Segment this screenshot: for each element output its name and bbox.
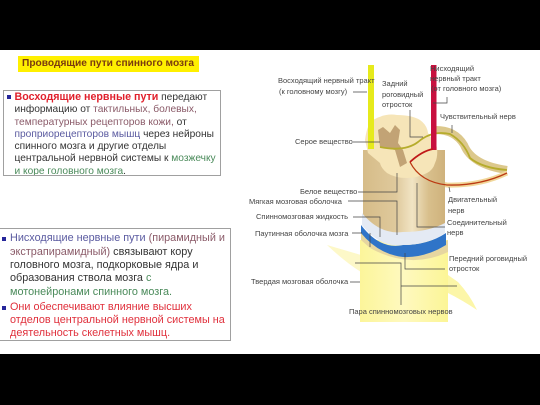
labels: (от головного мозга) (431, 84, 502, 93)
motor nerve sheath (412, 165, 507, 185)
labels: роговидный (382, 90, 423, 99)
sensory nerve fibre (380, 133, 507, 170)
cord cross-section white matter (365, 115, 437, 178)
labels: Мягкая мозговая оболочка (249, 197, 343, 206)
labels: Белое вещество (300, 187, 357, 196)
labels: Твердая мозговая оболочка (251, 277, 349, 286)
descending pathways text: образования ствола мозга с (10, 272, 151, 284)
motor nerve fibre (410, 162, 507, 185)
labels: отросток (382, 100, 413, 109)
blue arachnoid band (361, 225, 446, 257)
labels: Передний роговидный (449, 254, 527, 263)
influence text: Они обеспечивают влияние высших (10, 300, 192, 312)
labels: Задний (382, 79, 408, 88)
descending pathways text (10, 232, 225, 298)
labels: Соединительный (447, 218, 507, 227)
descending tract red (431, 65, 436, 150)
title: Проводящие пути спинного мозга (22, 58, 194, 69)
descending pathways text: Нисходящие нервные пути (пирамидный и (10, 232, 225, 244)
labels: нервный тракт (430, 74, 481, 83)
labels: нерв (448, 206, 464, 215)
ascending pathways text: спинного мозга и другие отделы (14, 141, 166, 152)
influence text: деятельность скелетных мышц. (10, 326, 170, 338)
influence text (10, 300, 225, 338)
cord column (363, 150, 445, 236)
ascending pathways text: температурных рецепторов кожи, от (14, 117, 187, 128)
descending pathways text: экстрапирамидный) связывают кору (10, 246, 193, 258)
labels: Нисходящий (430, 64, 474, 73)
yellow spinal nerve sheath (327, 240, 477, 322)
labels: Пара спинномозговых нервов (349, 307, 453, 316)
labels: Серое вещество (295, 137, 353, 146)
labels: Паутинная оболочка мозга (255, 229, 349, 238)
descending pathways text: головного мозга, подкорковые ядра и (10, 258, 198, 270)
title (18, 56, 199, 72)
labels (249, 64, 527, 316)
bullet (7, 95, 11, 99)
leader lines (348, 92, 457, 305)
dura mater band (361, 231, 448, 260)
labels: нерв (447, 228, 463, 237)
descending pathways text: мотонейронами спинного мозга. (10, 286, 172, 298)
labels: Чувствительный нерв (440, 112, 516, 121)
labels: Двигательный (448, 195, 497, 204)
descending tract branch (410, 149, 433, 162)
ascending pathways text: центральной нервной системы к мозжечку (14, 153, 216, 164)
grey matter (378, 125, 407, 167)
ascending pathways text: проприорецепторов мышц через нейроны (14, 129, 214, 140)
influence text: отделов центральной нервной системы на (10, 314, 225, 326)
sensory nerve (436, 130, 507, 170)
white fluid band (362, 213, 445, 245)
top black band (0, 0, 540, 50)
labels: (к головному мозгу) (279, 87, 348, 96)
panel: descending pathways (0, 228, 231, 341)
panel: ascending pathways (3, 90, 221, 176)
ascending tract yellow (368, 65, 374, 149)
ascending pathways text: информацию от тактильных, болевых, (14, 104, 197, 115)
ascending pathways text (14, 91, 216, 176)
bullet 2 (2, 306, 6, 310)
ascending pathways text: Восходящие нервные пути передают (14, 91, 207, 103)
labels: Восходящий нервный тракт (278, 76, 375, 85)
bullet 1 (2, 237, 6, 241)
labels: отросток (449, 264, 480, 273)
labels: Спинномозговая жидкость (256, 212, 348, 221)
bottom black band (0, 354, 540, 405)
